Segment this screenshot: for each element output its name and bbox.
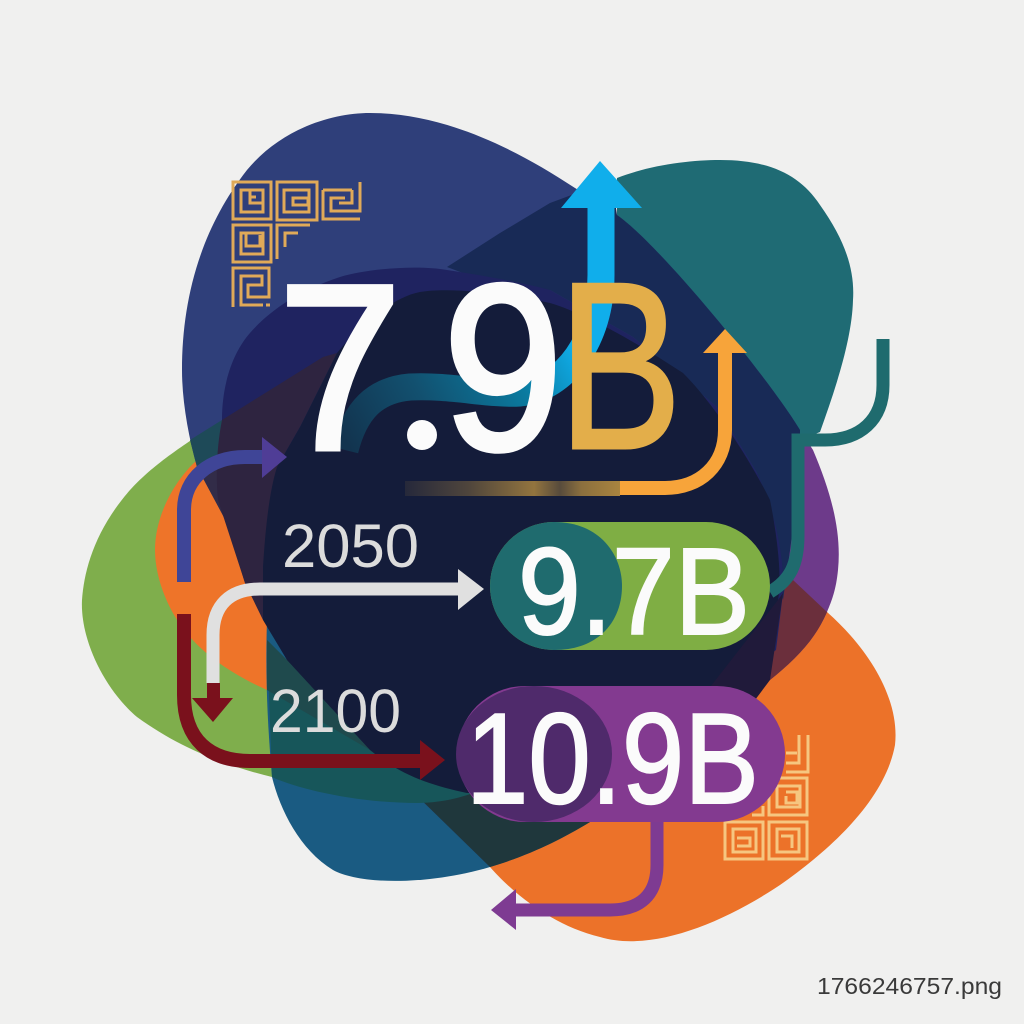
headline value 7.9: 7 xyxy=(278,236,402,500)
blob: dark overlap bottom xyxy=(287,650,700,867)
blob: blue bottom xyxy=(266,620,590,881)
arrow: teal hook connector xyxy=(770,339,883,592)
blob: dark violet sliver right xyxy=(700,593,783,730)
blob: teal green overlap bottom xyxy=(267,640,480,803)
blob: orange bottom right xyxy=(490,580,896,941)
meander pattern: top left xyxy=(233,182,360,307)
blob: grey violet sliver xyxy=(197,467,245,583)
blob: dark center xyxy=(263,290,780,793)
arrow: white to 9.7B xyxy=(213,569,484,683)
blob: green left xyxy=(82,357,323,777)
blob: dark teal band xyxy=(267,640,370,750)
blob: purple right xyxy=(740,430,839,680)
headline value 7.9 xyxy=(278,236,563,500)
pill: 10.9B: 10.9B xyxy=(466,687,759,831)
blob: navy top xyxy=(182,113,800,867)
blob: teal top right xyxy=(617,160,853,440)
arrow: indigo curved arrow xyxy=(184,437,287,582)
label 2050: 2050 xyxy=(282,512,419,580)
arrow: cyan rising arrow xyxy=(345,161,642,450)
blob: navy and teal overlap xyxy=(447,180,800,600)
blob: teal sliver upper left xyxy=(190,420,222,470)
blob: indigo ring xyxy=(222,268,783,667)
meander pattern: bottom right xyxy=(725,735,808,859)
headline unit B: B xyxy=(558,234,682,499)
blob: orange left xyxy=(155,460,300,690)
headline value 7.9: 9 xyxy=(443,236,563,500)
headline value 7.9: . xyxy=(414,367,439,467)
label 2100: 2100 xyxy=(270,677,401,745)
pill: 9.7B: 9.7B xyxy=(518,524,750,661)
arrow: dark red to 10.9B xyxy=(184,614,445,780)
blob: purple and orange overlap xyxy=(770,567,827,680)
file name caption: 1766246757.png xyxy=(817,973,1002,999)
arrow: dark red down head xyxy=(192,683,233,722)
arrow: purple return arrow xyxy=(491,820,657,930)
blob: brown overlap left xyxy=(217,353,337,620)
arrow: gold to orange rising arrow xyxy=(405,329,747,496)
